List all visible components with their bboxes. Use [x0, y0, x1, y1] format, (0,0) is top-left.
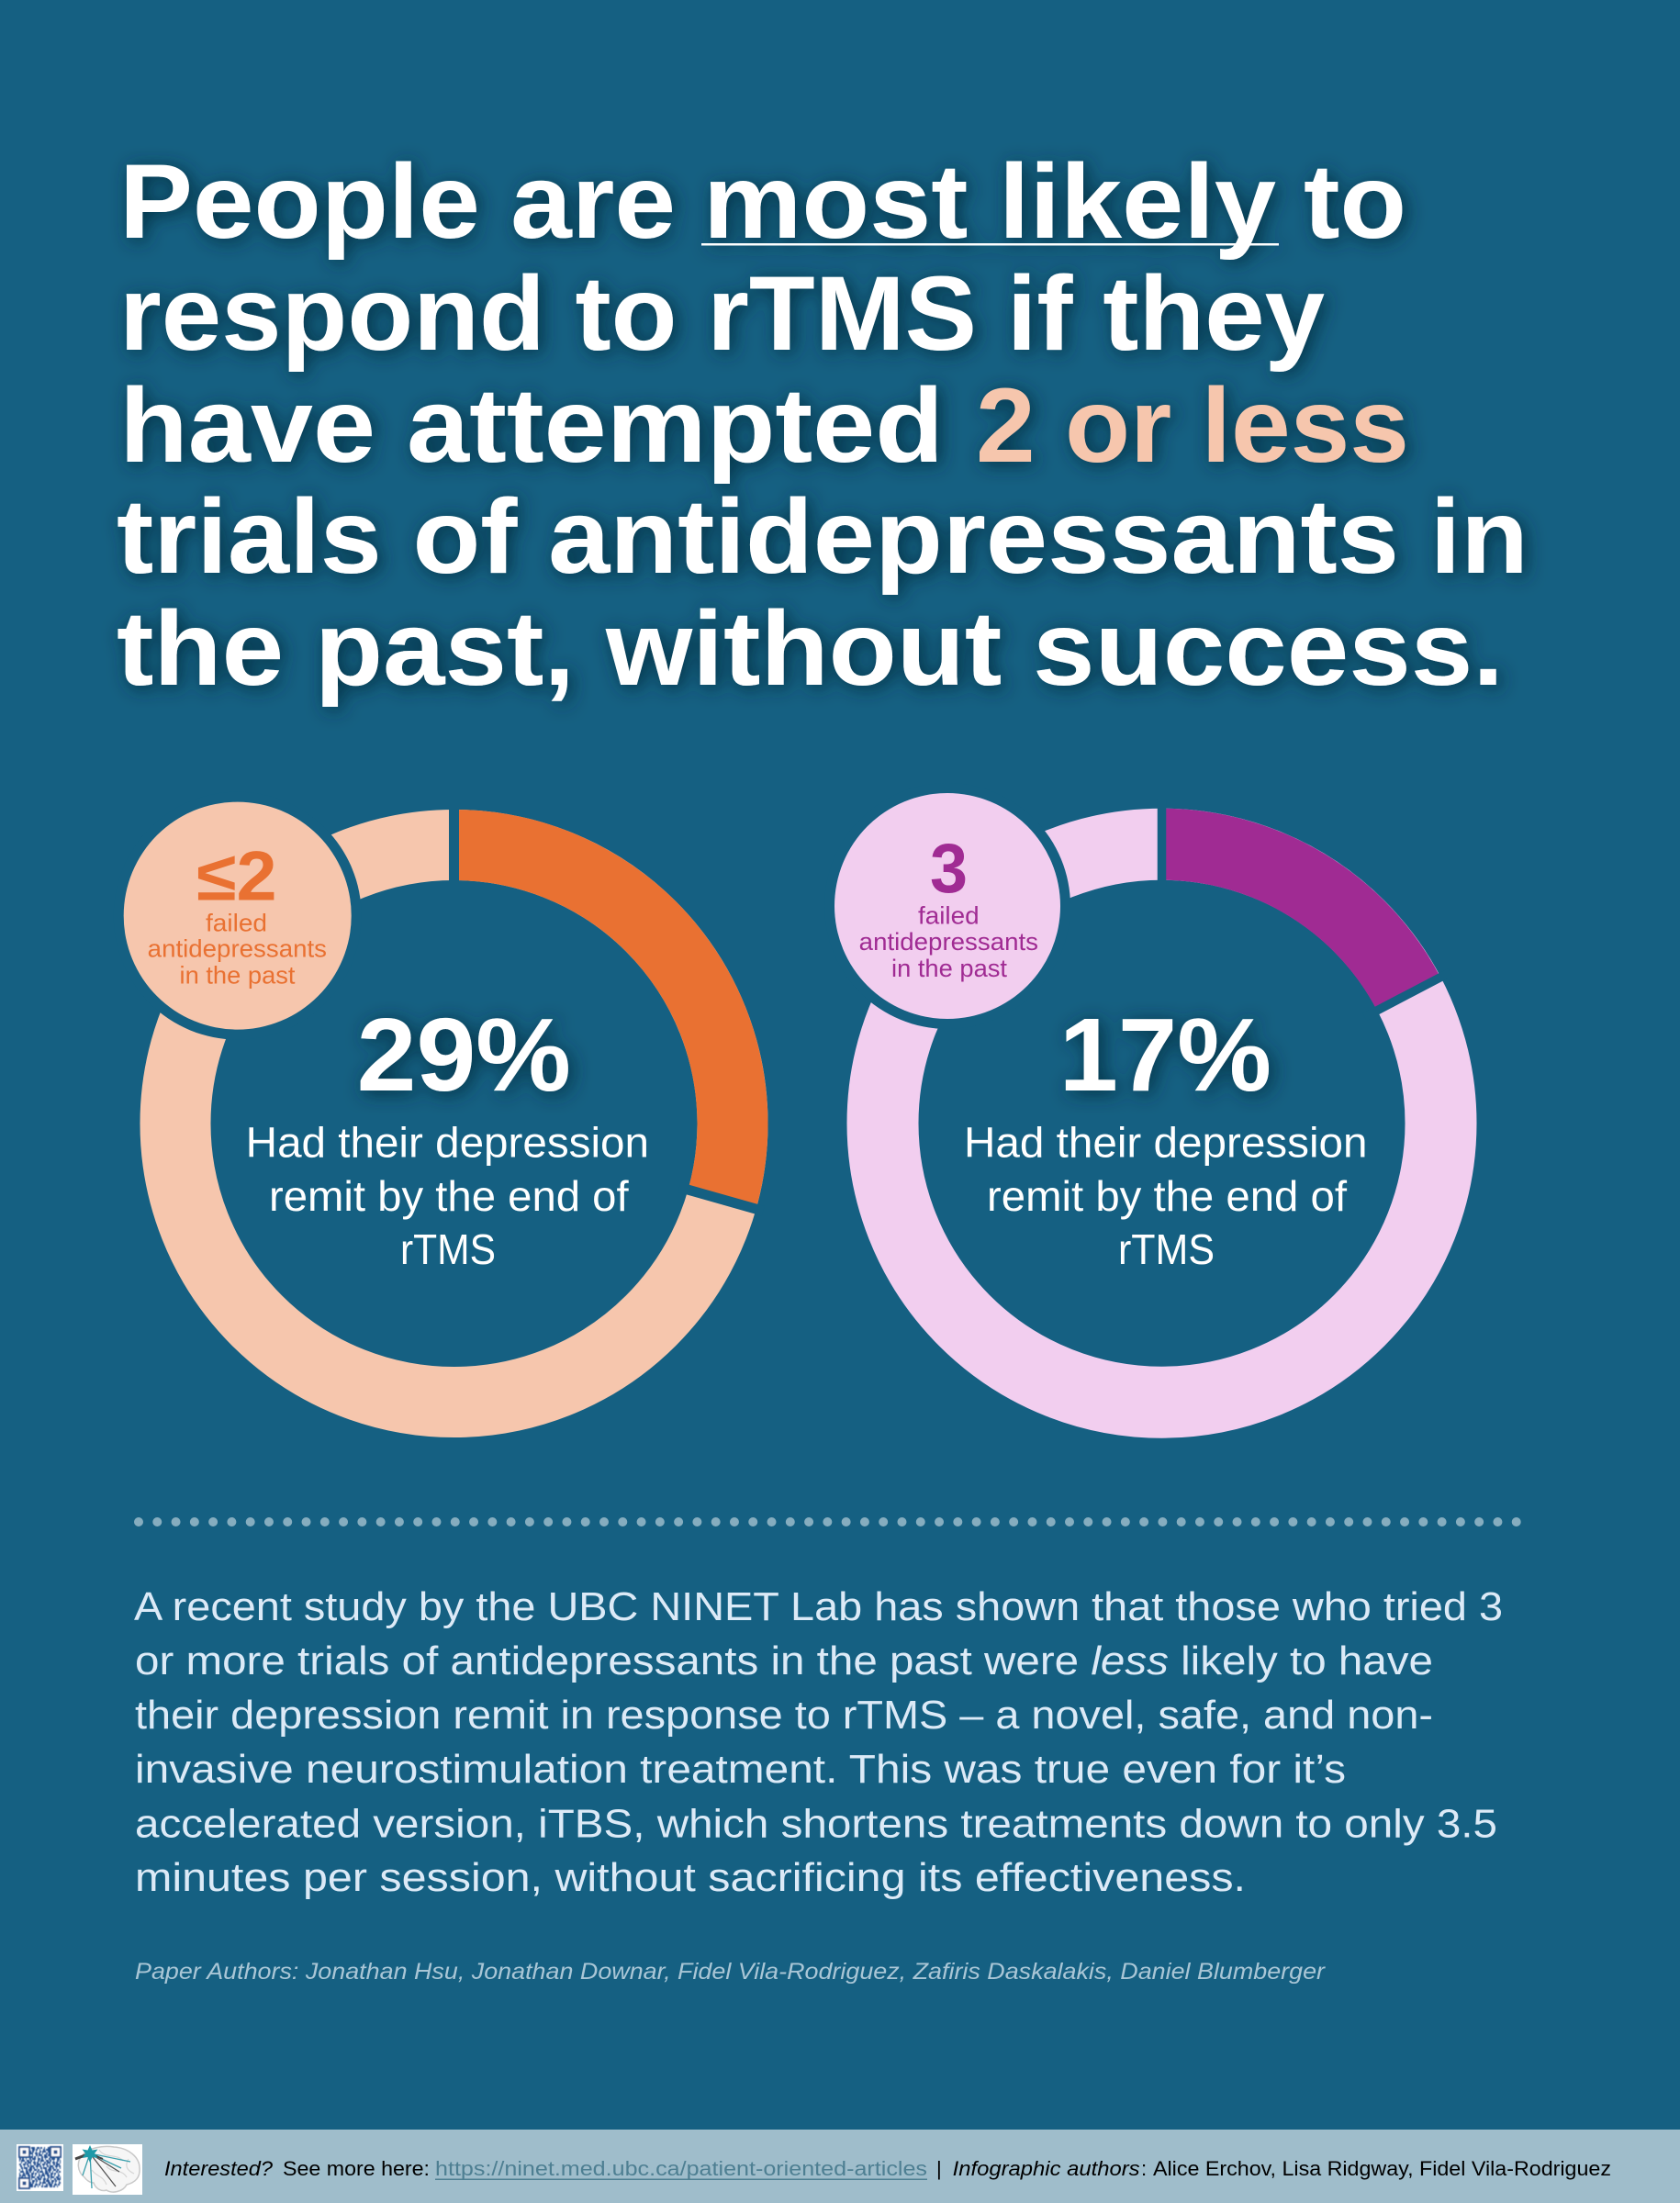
donut caption	[246, 1119, 649, 1273]
badge: 2 or fewer failed antidepressants: antidepressants	[148, 935, 327, 963]
badge: 2 or fewer failed antidepressants	[124, 802, 352, 1030]
donut caption: remit by the end of	[987, 1172, 1347, 1220]
donut arc: 29 percent	[454, 844, 733, 1200]
big number 17 percent: 17%	[1059, 997, 1271, 1113]
footer text	[164, 2157, 1611, 2180]
donut caption	[964, 1119, 1368, 1273]
title: People are	[119, 143, 676, 261]
donut caption: Had their depression	[964, 1119, 1368, 1167]
badge: 3 failed antidepressants: in the past	[891, 955, 1007, 982]
title: 2 or less	[976, 367, 1409, 485]
body paragraph: minutes per session, without sacrificing its effectiveness.	[135, 1855, 1246, 1900]
footer text: https://ninet.med.ubc.ca/patient-oriented-articles	[435, 2157, 927, 2180]
title: the past, without success.	[117, 590, 1504, 708]
title: most likely	[703, 143, 1276, 261]
icon: brain with network	[73, 2144, 142, 2195]
panel: donut chart 29 percent	[114, 792, 763, 1403]
body paragraph: their depression remit in response to rTMS – a novel, safe, and non-	[135, 1693, 1433, 1738]
donut caption: rTMS	[1118, 1225, 1215, 1273]
icon: QR code	[17, 2144, 63, 2191]
donut caption: Had their depression	[246, 1119, 649, 1167]
title: to	[1304, 143, 1406, 261]
body paragraph: accelerated version, iTBS, which shortens treatments down to only 3.5	[135, 1801, 1497, 1847]
title	[117, 143, 1529, 708]
footer text: Infographic authors	[953, 2157, 1140, 2180]
footer text: Alice Erchov, Lisa Ridgway, Fidel Vila-Rodriguez	[1153, 2157, 1611, 2180]
body paragraph	[134, 1584, 1503, 1900]
body paragraph: A recent study by the UBC NINET Lab has shown that those who tried 3	[134, 1584, 1503, 1629]
donut arc: 17 percent	[1162, 844, 1409, 994]
badge: 3 failed antidepressants: 3	[930, 830, 968, 908]
donut ring: remainder	[883, 844, 1441, 1403]
badge: 3 failed antidepressants: failed	[918, 902, 980, 930]
title: respond to rTMS if they	[119, 255, 1325, 373]
badge: 3 failed antidepressants: antidepressants	[859, 928, 1038, 956]
body paragraph: or more trials of antidepressants in the past were less likely to have	[135, 1638, 1433, 1683]
body paragraph: invasive neurostimulation treatment. This was true even for it’s	[135, 1747, 1346, 1792]
footer text: |	[936, 2157, 942, 2180]
title: trials of antidepressants in	[117, 478, 1529, 596]
badge: 2 or fewer failed antidepressants: ≤2	[196, 838, 277, 916]
footer text: See more here:	[283, 2157, 430, 2180]
donut ring: remainder	[175, 844, 733, 1403]
footer text: Interested?	[164, 2157, 274, 2180]
badge: 3 failed antidepressants	[834, 793, 1060, 1019]
badge: 2 or fewer failed antidepressants: in the past	[180, 962, 296, 990]
footer bar	[0, 2130, 1680, 2203]
title: have attempted	[119, 367, 944, 485]
donut caption: rTMS	[400, 1225, 496, 1273]
footer text: :	[1141, 2157, 1147, 2180]
panel: donut chart 17 percent	[824, 783, 1450, 1403]
big number 29 percent: 29%	[357, 997, 571, 1113]
badge: 2 or fewer failed antidepressants: failed	[206, 909, 267, 936]
donut caption: remit by the end of	[269, 1172, 629, 1220]
paper authors: Paper Authors: Jonathan Hsu, Jonathan Downar, Fidel Vila-Rodriguez, Zafiris Daskalakis, Daniel Blumberger	[135, 1959, 1327, 1985]
